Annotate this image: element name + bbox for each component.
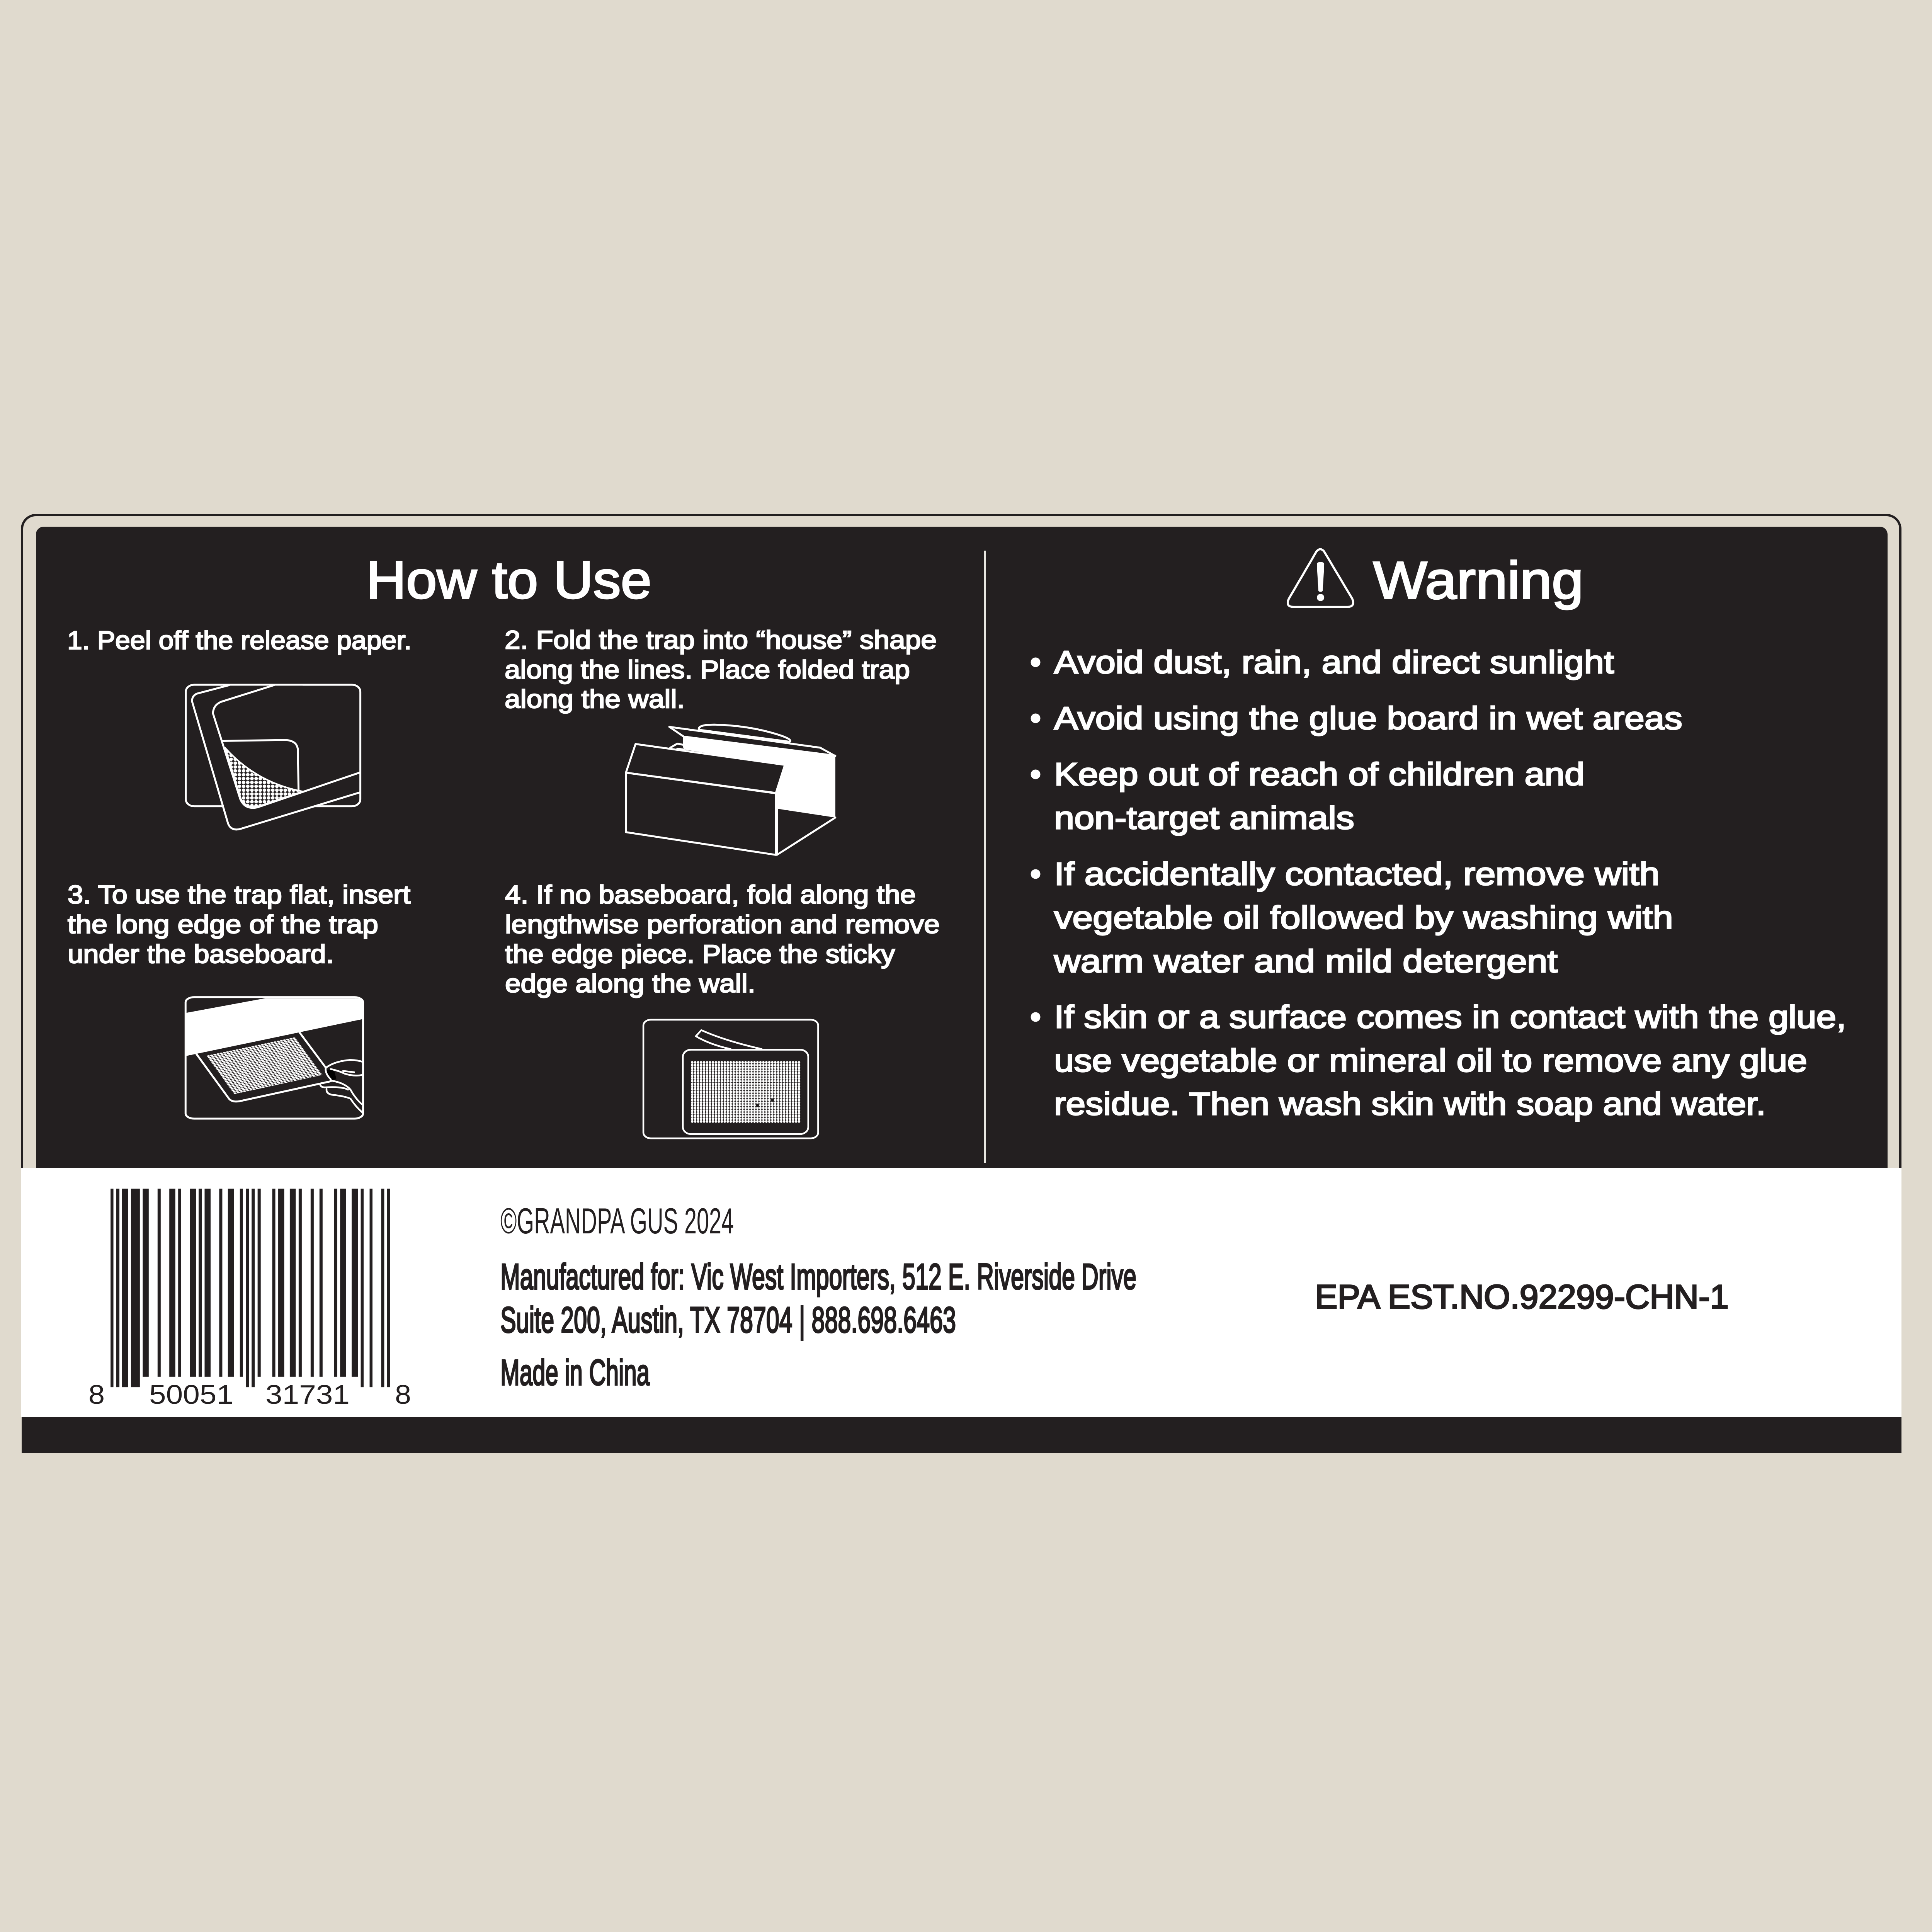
icon: warning triangle xyxy=(1288,549,1353,607)
warning item 4: warm water and mild detergent xyxy=(1054,943,1558,979)
barcode digits: 8 xyxy=(395,1379,411,1410)
icon: insert trap under baseboard xyxy=(185,997,364,1119)
barcode digits: 31731 xyxy=(265,1379,350,1410)
step 3 text: under the baseboard. xyxy=(68,940,334,969)
EPA establishment number: EPA EST.NO.92299-CHN-1 xyxy=(1315,1278,1729,1316)
manufacturer address: Suite 200, Austin, TX 78704 | 888.698.6463 xyxy=(500,1299,956,1340)
warning item 3: Keep out of reach of children and xyxy=(1054,756,1585,792)
step 3 text: the long edge of the trap xyxy=(68,910,378,939)
barcode digits xyxy=(88,1379,411,1410)
icon: folded house-shape trap xyxy=(626,724,835,855)
white footer panel xyxy=(21,1168,1901,1417)
heading: Warning: Warning xyxy=(1373,551,1583,610)
icon: remove edge piece, sticky edge xyxy=(643,1020,818,1138)
barcode xyxy=(88,1189,411,1410)
step 2 text: along the lines. Place folded trap xyxy=(505,655,910,684)
manufacturer address xyxy=(500,1256,1136,1340)
dark instructions panel xyxy=(36,527,1888,1168)
warning item 3 xyxy=(1031,756,1585,836)
icon: peel off release paper xyxy=(186,685,361,830)
step 4 text: edge along the wall. xyxy=(505,969,755,998)
country of origin: Made in China xyxy=(500,1352,650,1393)
step 4 text: 4. If no baseboard, fold along the xyxy=(505,880,916,909)
step 4 text xyxy=(505,880,940,998)
barcode digits: 8 xyxy=(88,1379,105,1410)
warning item 4 xyxy=(1031,856,1673,979)
label outer frame xyxy=(22,515,1900,1168)
step 2 text xyxy=(505,626,937,714)
dotted glue area xyxy=(691,1061,801,1123)
warning item 1: Avoid dust, rain, and direct sunlight xyxy=(1054,644,1614,680)
trapped pests xyxy=(756,1098,774,1107)
barcode digits: 50051 xyxy=(149,1379,233,1410)
step 3 text xyxy=(68,880,410,969)
black bottom band xyxy=(22,1417,1901,1453)
copyright line: ©GRANDPA GUS 2024 xyxy=(500,1201,734,1241)
step 4 text: the edge piece. Place the sticky xyxy=(505,940,895,969)
warning item 5 xyxy=(1031,999,1846,1122)
warning item 2: Avoid using the glue board in wet areas xyxy=(1054,700,1682,736)
step 2 text: along the wall. xyxy=(505,685,685,714)
dotted glue area xyxy=(206,1037,323,1094)
step 1 text: 1. Peel off the release paper. xyxy=(67,626,412,655)
hand holding trap xyxy=(320,1060,363,1112)
column divider xyxy=(984,551,986,1163)
manufacturer address: Manufactured for: Vic West Importers, 512 E. Riverside Drive xyxy=(500,1256,1136,1297)
warning item 5: residue. Then wash skin with soap and water. xyxy=(1054,1086,1766,1122)
warning item 5: use vegetable or mineral oil to remove any glue xyxy=(1054,1043,1807,1078)
step 3 text: 3. To use the trap flat, insert xyxy=(68,880,410,909)
heading: How to Use: How to Use xyxy=(366,551,651,610)
warning item 3: non-target animals xyxy=(1054,800,1354,836)
warning item 4: vegetable oil followed by washing with xyxy=(1054,900,1673,935)
warning item 4: If accidentally contacted, remove with xyxy=(1054,856,1660,892)
step 4 text: lengthwise perforation and remove xyxy=(505,910,940,939)
warning item 5: If skin or a surface comes in contact with the glue, xyxy=(1054,999,1846,1035)
step 2 text: 2. Fold the trap into “house” shape xyxy=(505,626,937,655)
